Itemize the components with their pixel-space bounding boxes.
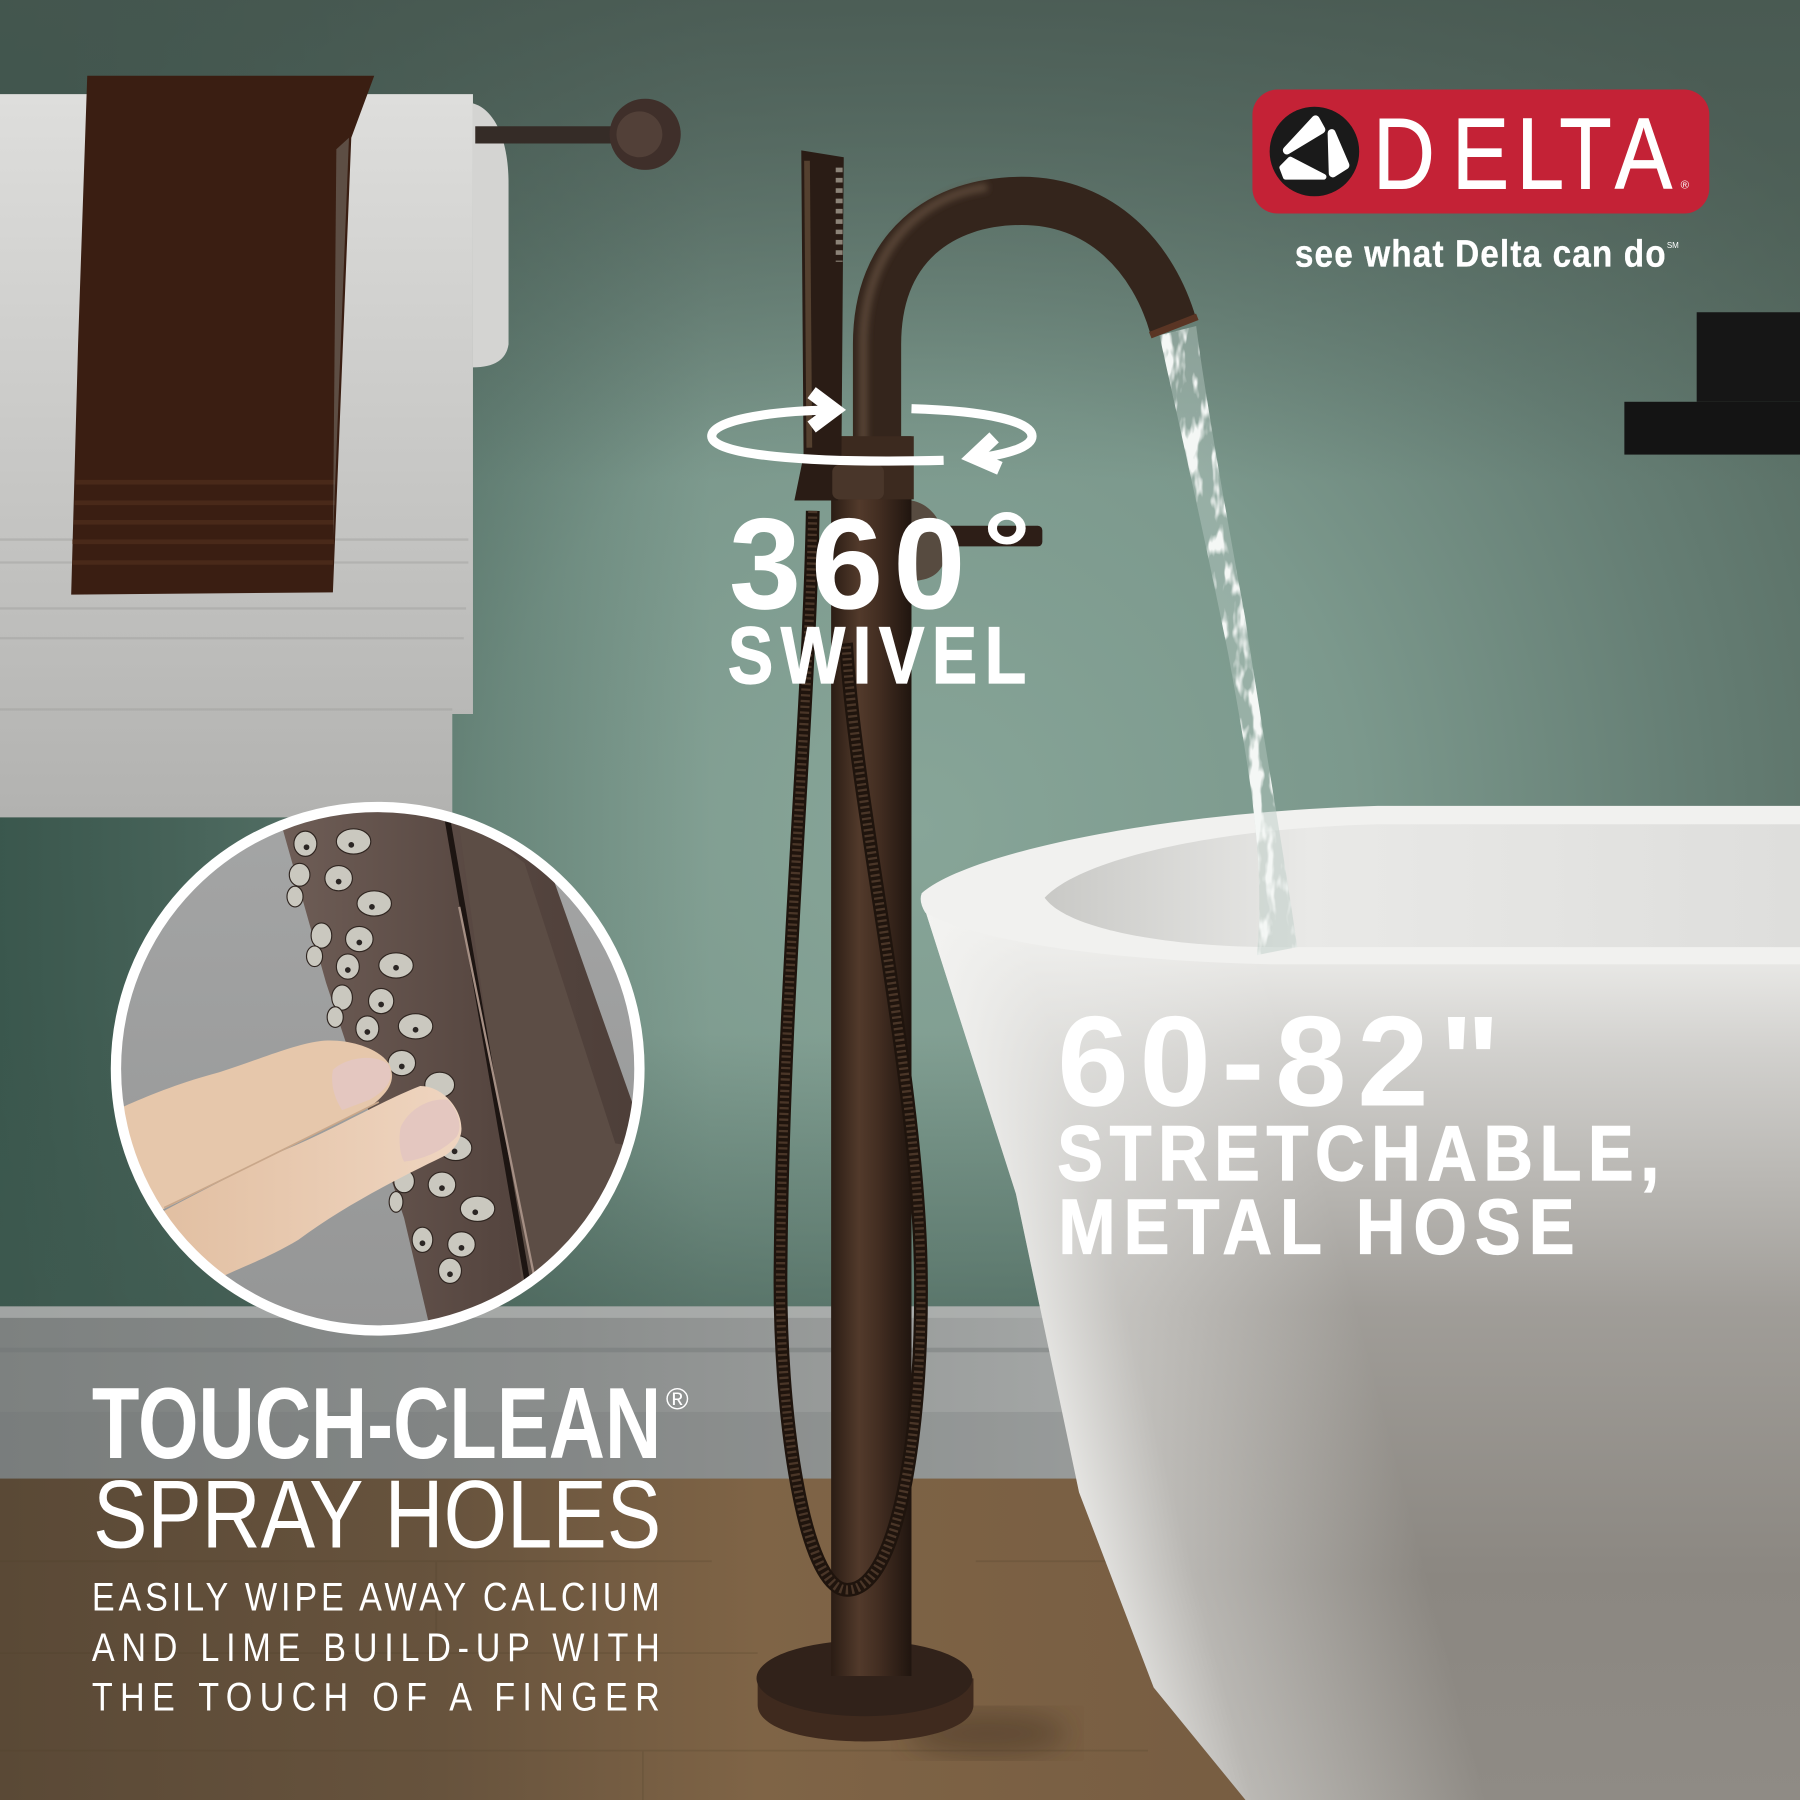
- tub body: [924, 907, 1800, 1800]
- white towel: [0, 94, 509, 817]
- handle lever: [944, 526, 1042, 546]
- tub interior: [1045, 824, 1800, 947]
- stretchable hose callout: STRETCHABLE,: [1057, 1109, 1659, 1197]
- wall shelf fixture: [1624, 312, 1800, 455]
- 360 degree swivel callout: °: [983, 490, 1031, 608]
- touch-clean description: [92, 1574, 660, 1719]
- swivel arrows: [712, 393, 1032, 468]
- 360 degree swivel callout: 360: [729, 492, 965, 636]
- finger nails: [332, 1058, 391, 1110]
- touch-clean heading: TOUCH-CLEAN: [92, 1368, 661, 1480]
- bathtub: [921, 806, 1800, 1800]
- floor base: [758, 1678, 973, 1741]
- 360 degree swivel callout: SWIVEL: [728, 610, 1026, 700]
- lower finger: [164, 1086, 462, 1275]
- spout: [877, 201, 1173, 442]
- upper finger: [124, 1040, 392, 1210]
- tagline: see what Delta can do: [1295, 232, 1666, 275]
- spray nozzles: [287, 829, 495, 1283]
- pole: [831, 436, 911, 1676]
- touch-clean description: EASILY WIPE AWAY CALCIUM: [92, 1574, 660, 1619]
- baseboard: [0, 1306, 1148, 1481]
- 360 degree swivel callout: [728, 490, 1031, 700]
- faucet: [757, 150, 1197, 1741]
- touch-clean heading: [92, 1368, 689, 1568]
- holder: [832, 465, 884, 499]
- stretchable hose callout: [1057, 990, 1659, 1271]
- nozzle holes: [304, 842, 478, 1277]
- metal hose: [780, 511, 921, 1590]
- Delta logo: [1252, 90, 1709, 214]
- touch-clean heading: ®: [666, 1382, 689, 1417]
- collar: [840, 436, 914, 499]
- touch-clean heading: SPRAY HOLES: [93, 1461, 661, 1568]
- logo mark: [1270, 107, 1359, 196]
- brown towel: [71, 76, 374, 595]
- finger crease: [164, 1102, 379, 1208]
- tagline: SM: [1667, 241, 1679, 250]
- spray holes inset: [110, 802, 645, 1336]
- inset ring: [116, 807, 639, 1330]
- hand shower: [794, 150, 844, 501]
- wordmark: DELTA: [1373, 97, 1673, 210]
- tub rim: [921, 806, 1800, 964]
- Delta logo: ®: [1681, 179, 1690, 191]
- wood floor: [0, 1479, 1263, 1800]
- spout tip: [1150, 317, 1197, 335]
- shower head close-up: [283, 812, 632, 1320]
- stretchable hose callout: 60-82": [1057, 990, 1500, 1133]
- towel bar: [475, 99, 681, 170]
- handle dial: [911, 501, 946, 581]
- touch-clean description: THE TOUCH OF A FINGER: [92, 1674, 660, 1719]
- touch-clean description: AND LIME BUILD-UP WITH: [92, 1624, 660, 1670]
- water stream: [1159, 326, 1297, 955]
- stretchable hose callout: METAL HOSE: [1058, 1182, 1575, 1271]
